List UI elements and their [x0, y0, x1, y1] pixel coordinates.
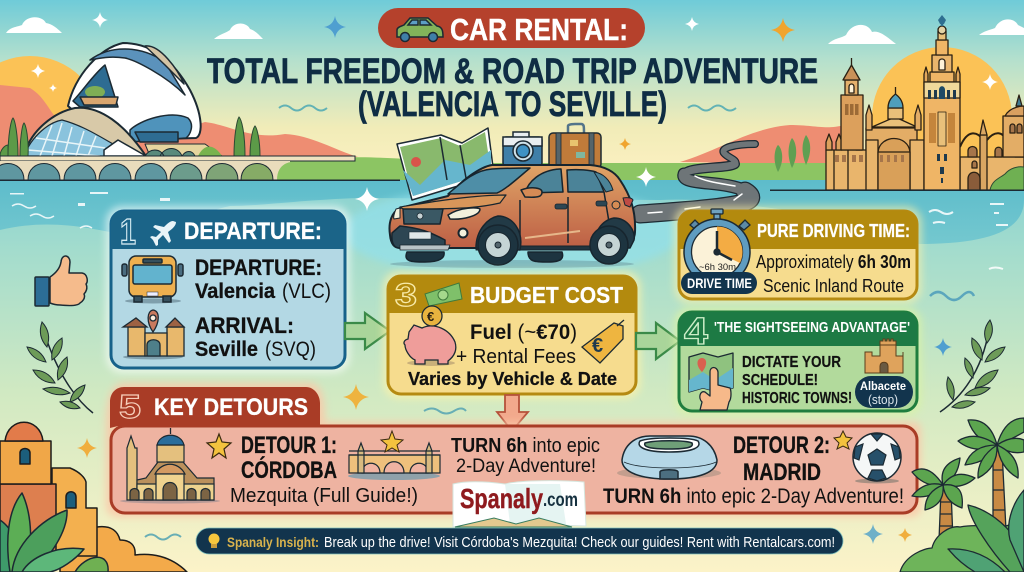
arrival text — [195, 313, 316, 361]
albacete stop badge: (stop) — [868, 393, 898, 407]
icon: stopwatch — [684, 209, 750, 285]
right wing — [960, 95, 1024, 190]
number 5: 5 — [119, 388, 141, 425]
body text — [756, 252, 911, 296]
Giralda tower — [924, 82, 960, 190]
right decoration: palm trees — [912, 418, 1024, 540]
number 4: 4 — [684, 311, 708, 353]
camera on roof — [503, 132, 542, 166]
icon: banknote — [425, 283, 462, 306]
header text: DEPARTURE: — [184, 218, 322, 245]
icon: green car — [397, 18, 443, 42]
water ripples — [10, 192, 1008, 269]
icon: station with pin — [123, 310, 184, 360]
number 3: 3 — [395, 277, 417, 313]
cypress trees — [0, 117, 260, 156]
body text: DICTATE YOUR — [742, 354, 841, 371]
landmark: Valencia arts complex — [24, 43, 222, 156]
icon: price tag — [582, 320, 624, 363]
header text: KEY DETOURS — [154, 394, 308, 421]
title — [207, 52, 818, 124]
shoreline edge — [770, 190, 1024, 191]
green land strip — [0, 157, 840, 190]
left wall — [826, 150, 924, 190]
fuel text: Varies by Vehicle & Date — [408, 369, 617, 389]
title pill — [378, 8, 645, 48]
icon: hand on map — [689, 353, 733, 410]
detour 2 text: DETOUR 2: — [733, 432, 830, 459]
body text: HISTORIC TOWNS! — [742, 390, 852, 407]
icon: Cordoba mosque — [120, 428, 220, 504]
departure text — [195, 255, 331, 303]
drive time badge — [681, 272, 757, 294]
left decoration: hillside house — [0, 422, 187, 572]
sparkles around car — [355, 167, 656, 211]
icon: stopwatch: ~6h 30m — [699, 262, 736, 273]
body text: Scenic Inland Route — [763, 276, 904, 296]
icon: airplane — [150, 221, 176, 246]
detour 2 text: TURN 6h into epic 2-Day Adventure! — [603, 485, 904, 508]
icon: Roman bridge — [348, 443, 440, 480]
water glow around car — [342, 186, 682, 278]
folded map behind car — [397, 128, 494, 200]
number 1: 1 — [120, 211, 136, 252]
suitcase on roof — [549, 124, 601, 168]
header text: PURE DRIVING TIME: — [757, 221, 910, 241]
detour 2 text — [603, 432, 904, 508]
sparkles sky — [31, 12, 998, 150]
arrow: budget to sightseeing — [636, 323, 680, 359]
panel 5: key detours — [106, 383, 921, 517]
turn 6h text 1: 2-Day Adventure! — [456, 456, 596, 477]
title: TOTAL FREEDOM & ROAD TRIP ADVENTURE — [207, 52, 818, 91]
spanaly.com logo: Spanaly — [460, 483, 543, 514]
icon: soccer ball — [853, 433, 901, 484]
car — [389, 165, 635, 268]
icon: thumbs up — [35, 256, 87, 306]
icon: star — [207, 434, 231, 458]
panel 3: budget cost — [383, 271, 641, 399]
fuel text — [408, 321, 617, 389]
body text: SCHEDULE! — [742, 372, 818, 389]
departure text: Valencia — [195, 280, 275, 303]
departure text: (VLC) — [282, 280, 331, 303]
icon: piggy bank: € — [427, 309, 434, 324]
body text: Approximately 6h 30m — [756, 252, 911, 272]
icon: price tag: € — [592, 335, 603, 357]
icon: stadium — [617, 436, 721, 479]
cypress trees right — [775, 135, 810, 172]
arrival text: (SVQ) — [265, 338, 316, 361]
panel: pure driving time — [674, 206, 922, 304]
central nave and dome — [866, 128, 917, 150]
icon: star above bridge — [381, 431, 403, 452]
insight text: Spanaly Insight: — [227, 534, 319, 550]
right decoration: bush and large leaves — [900, 490, 1024, 572]
drive time badge: DRIVE TIME — [687, 275, 752, 291]
fuel text: + Rental Fees — [456, 346, 576, 368]
sparkle and wave lower left — [77, 384, 466, 540]
detour 1 text: CÓRDOBA — [241, 456, 337, 484]
road — [640, 144, 755, 214]
sparkles lower right — [863, 524, 912, 544]
fuel text: Fuel (~€70) — [470, 321, 577, 344]
title: (VALENCIA TO SEVILLE) — [358, 85, 667, 124]
turn 6h text 1 — [451, 435, 600, 477]
spanaly.com logo: .com — [543, 490, 578, 511]
icon: castle — [865, 339, 903, 373]
arrival text: ARRIVAL: — [195, 313, 294, 338]
header text: BUDGET COST — [470, 282, 623, 308]
icon: olive branch left — [27, 322, 93, 413]
header text: 'THE SIGHTSEEING ADVANTAGE' — [714, 319, 910, 336]
icon: olive branch right — [940, 320, 1005, 412]
left tower — [841, 95, 863, 150]
detour 1 text — [230, 432, 418, 507]
arrival text: Seville — [195, 338, 258, 361]
mountains right — [680, 125, 860, 165]
left decoration: large leaves — [0, 493, 108, 572]
icon: piggy bank — [404, 306, 456, 366]
sparkle right blue — [934, 338, 952, 356]
icon: light bulb — [208, 534, 220, 548]
panel 4: sightseeing advantage — [674, 307, 922, 416]
arrow: budget to detours — [497, 395, 528, 431]
icon: bus — [122, 256, 183, 304]
sun left — [0, 56, 102, 200]
insight bar — [196, 528, 843, 554]
landmark: Seville cathedral and Giralda — [826, 15, 1024, 190]
water — [0, 180, 1024, 244]
insight bar: Break up the drive! Visit Córdoba's Mezquita! Check our guides! Rent with Rentalcars.com! — [324, 535, 835, 551]
turn 6h text 1: TURN 6h into epic — [451, 435, 600, 457]
departure text: DEPARTURE: — [195, 255, 322, 280]
panel 1: departure — [106, 206, 350, 373]
sun right — [872, 47, 1012, 187]
green bush at Seville — [990, 167, 1024, 190]
clouds — [6, 17, 1024, 44]
pill text: CAR RENTAL: — [450, 12, 628, 47]
albacete stop badge: Albacete — [860, 379, 906, 393]
detour 1 text: Mezquita (Full Guide!) — [230, 485, 418, 507]
detour 2 text: MADRID — [743, 459, 821, 486]
arrow: departure to budget — [345, 313, 390, 349]
sea wave right — [930, 292, 974, 300]
albacete stop badge — [855, 376, 913, 408]
spanaly.com logo — [453, 481, 586, 527]
icon: star by detour 2 — [834, 431, 852, 449]
detour 1 text: DETOUR 1: — [241, 432, 337, 459]
bridge — [0, 156, 400, 181]
mountains left — [0, 85, 358, 160]
body text — [742, 354, 852, 407]
